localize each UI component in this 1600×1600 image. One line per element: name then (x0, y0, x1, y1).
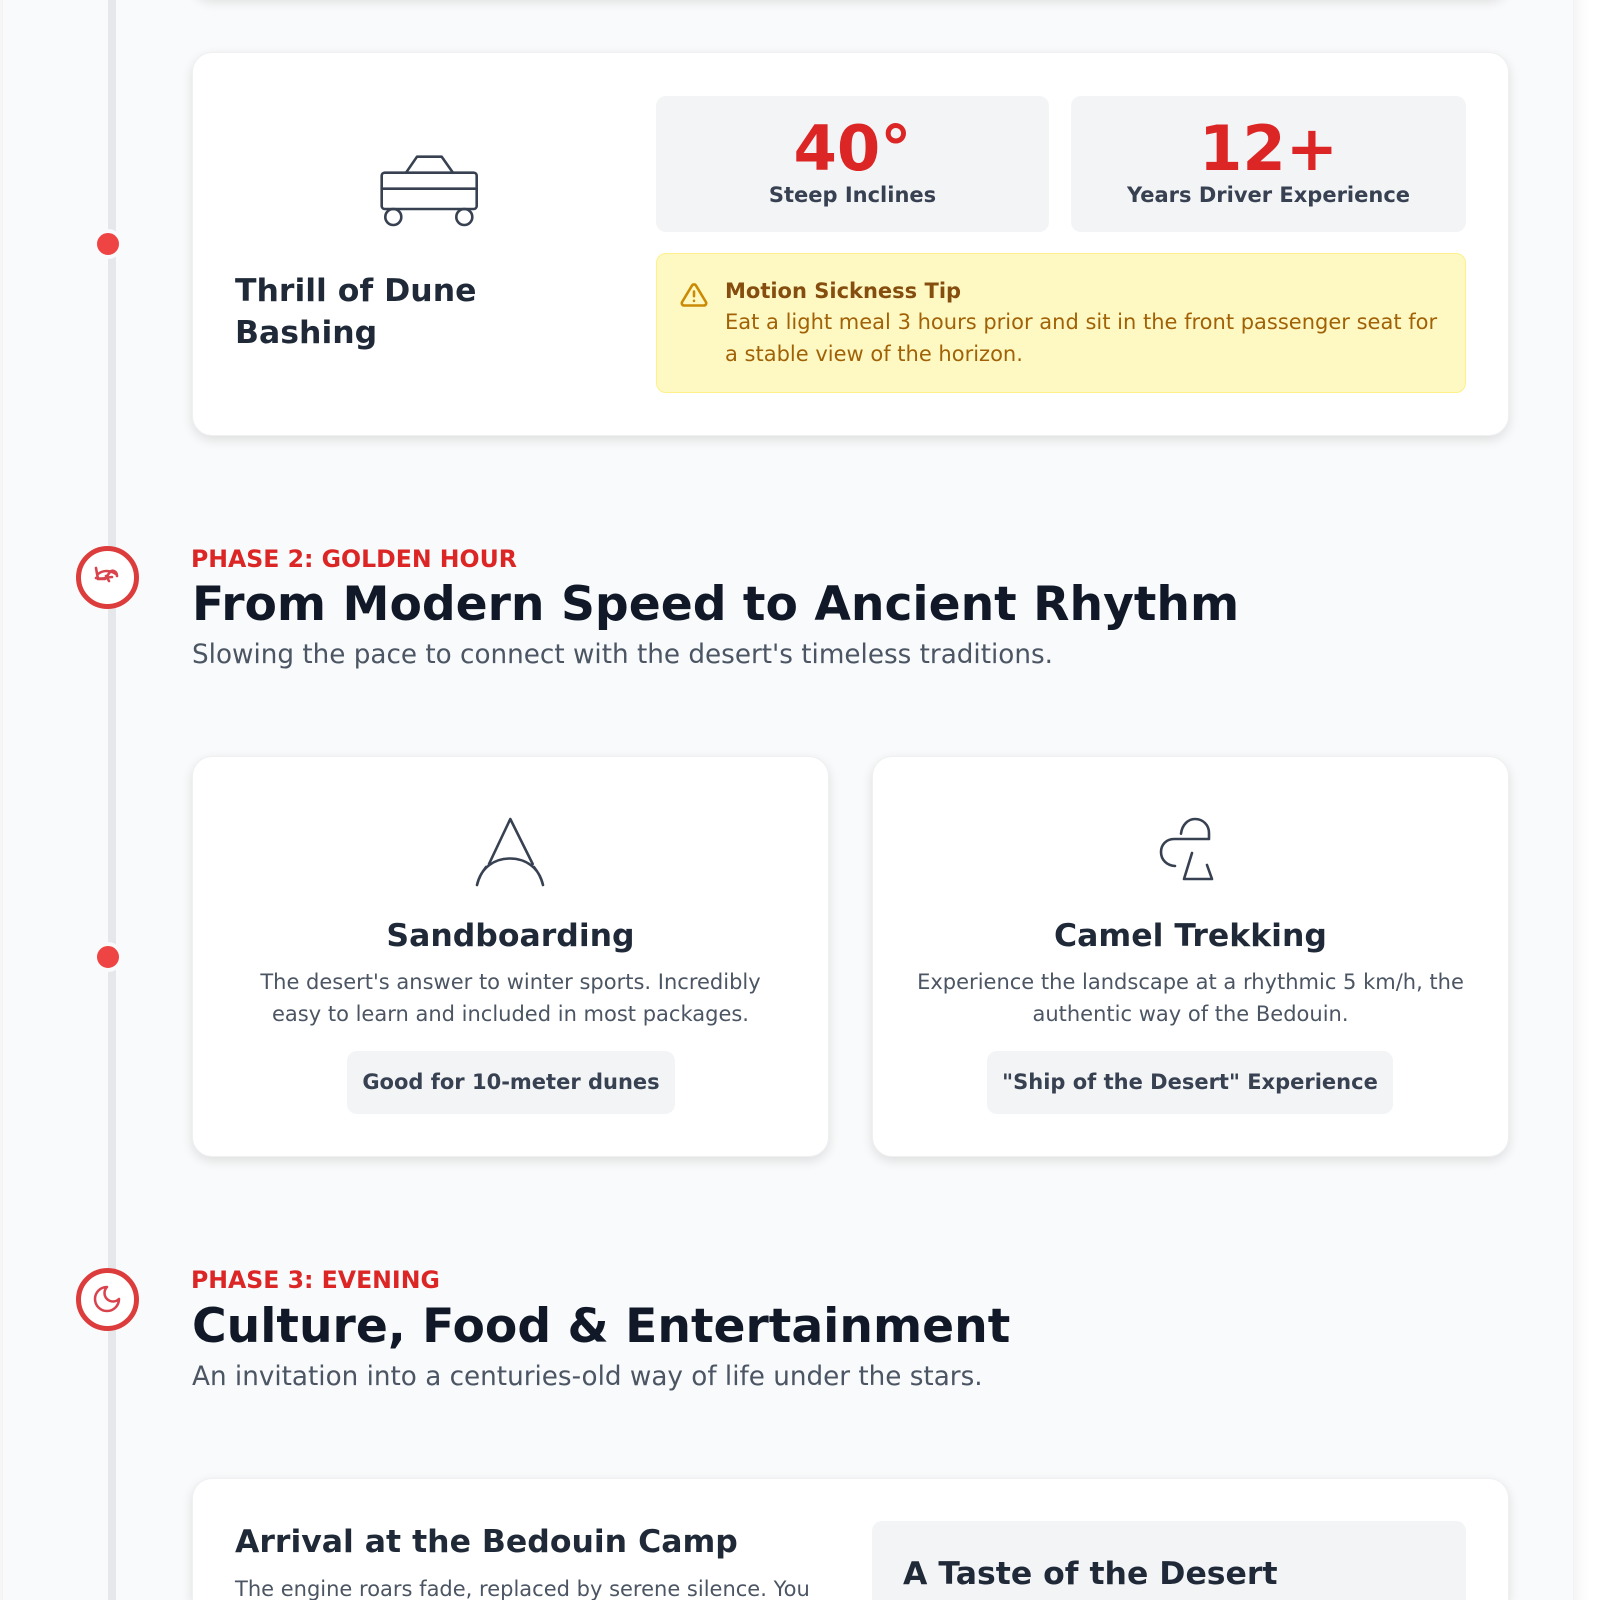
phase 3 header (191, 1266, 1010, 1392)
icon: car (380, 155, 478, 226)
panel: dune bashing (192, 52, 1509, 436)
chip: Good for 10-meter dunes (362, 1070, 660, 1094)
panel: camel trekking (872, 756, 1509, 1157)
icon: warning (680, 283, 708, 307)
stat: steep inclines (656, 96, 1049, 232)
card text (260, 970, 761, 1026)
card title: Sandboarding (386, 918, 635, 954)
chip: "Ship of the Desert" Experience (1002, 1070, 1378, 1094)
heading: thrill of dune bashing: Bashing (235, 315, 377, 351)
chip (347, 1051, 675, 1114)
card text: Experience the landscape at a rhythmic 5 km/h, the (917, 970, 1464, 994)
eyebrow: PHASE 2: GOLDEN HOUR (191, 545, 517, 573)
card text: The desert's answer to winter sports. Incredibly (260, 970, 761, 994)
timeline dot 1 (92, 229, 122, 259)
heading: From Modern Speed to Ancient Rhythm (192, 577, 1239, 632)
stat value: 40° (793, 112, 912, 185)
stat label: Steep Inclines (769, 183, 936, 207)
subheading: An invitation into a centuries-old way of life under the stars. (192, 1362, 983, 1392)
heading: Culture, Food & Entertainment (192, 1299, 1010, 1354)
panel title: A Taste of the Desert (903, 1556, 1278, 1592)
callout title: Motion Sickness Tip (725, 279, 961, 303)
panel: bedouin camp (192, 1478, 1509, 1600)
panel: sandboarding (192, 756, 829, 1157)
heading: thrill of dune bashing (235, 273, 476, 351)
subheading: Slowing the pace to connect with the desert's timeless traditions. (192, 640, 1053, 670)
card text (917, 970, 1464, 1026)
phase 2 header (191, 545, 1239, 670)
stat label: Years Driver Experience (1127, 183, 1410, 207)
callout text: a stable view of the horizon. (725, 342, 1023, 366)
card text: easy to learn and included in most packages. (272, 1002, 749, 1026)
callout: motion sickness tip (656, 253, 1466, 393)
callout text: Eat a light meal 3 hours prior and sit in the front passenger seat for (725, 310, 1437, 334)
card title: Camel Trekking (1054, 918, 1327, 954)
card title: Arrival at the Bedouin Camp (235, 1524, 738, 1560)
callout text (725, 310, 1438, 366)
phase 3 marker icon (76, 1268, 139, 1331)
stat value: 12+ (1199, 112, 1338, 185)
icon: camel (1160, 818, 1214, 880)
stat: driver experience (1071, 96, 1466, 232)
timeline line (108, 0, 116, 1600)
icon: sandboard (476, 818, 544, 886)
timeline dot 2 (92, 942, 122, 972)
eyebrow: PHASE 3: EVENING (191, 1266, 440, 1294)
chip (987, 1051, 1393, 1114)
heading: thrill of dune bashing: Thrill of Dune (235, 273, 476, 309)
phase 2 marker icon (76, 546, 139, 609)
panel: taste of the desert (872, 1521, 1466, 1600)
card text: authentic way of the Bedouin. (1032, 1002, 1349, 1026)
